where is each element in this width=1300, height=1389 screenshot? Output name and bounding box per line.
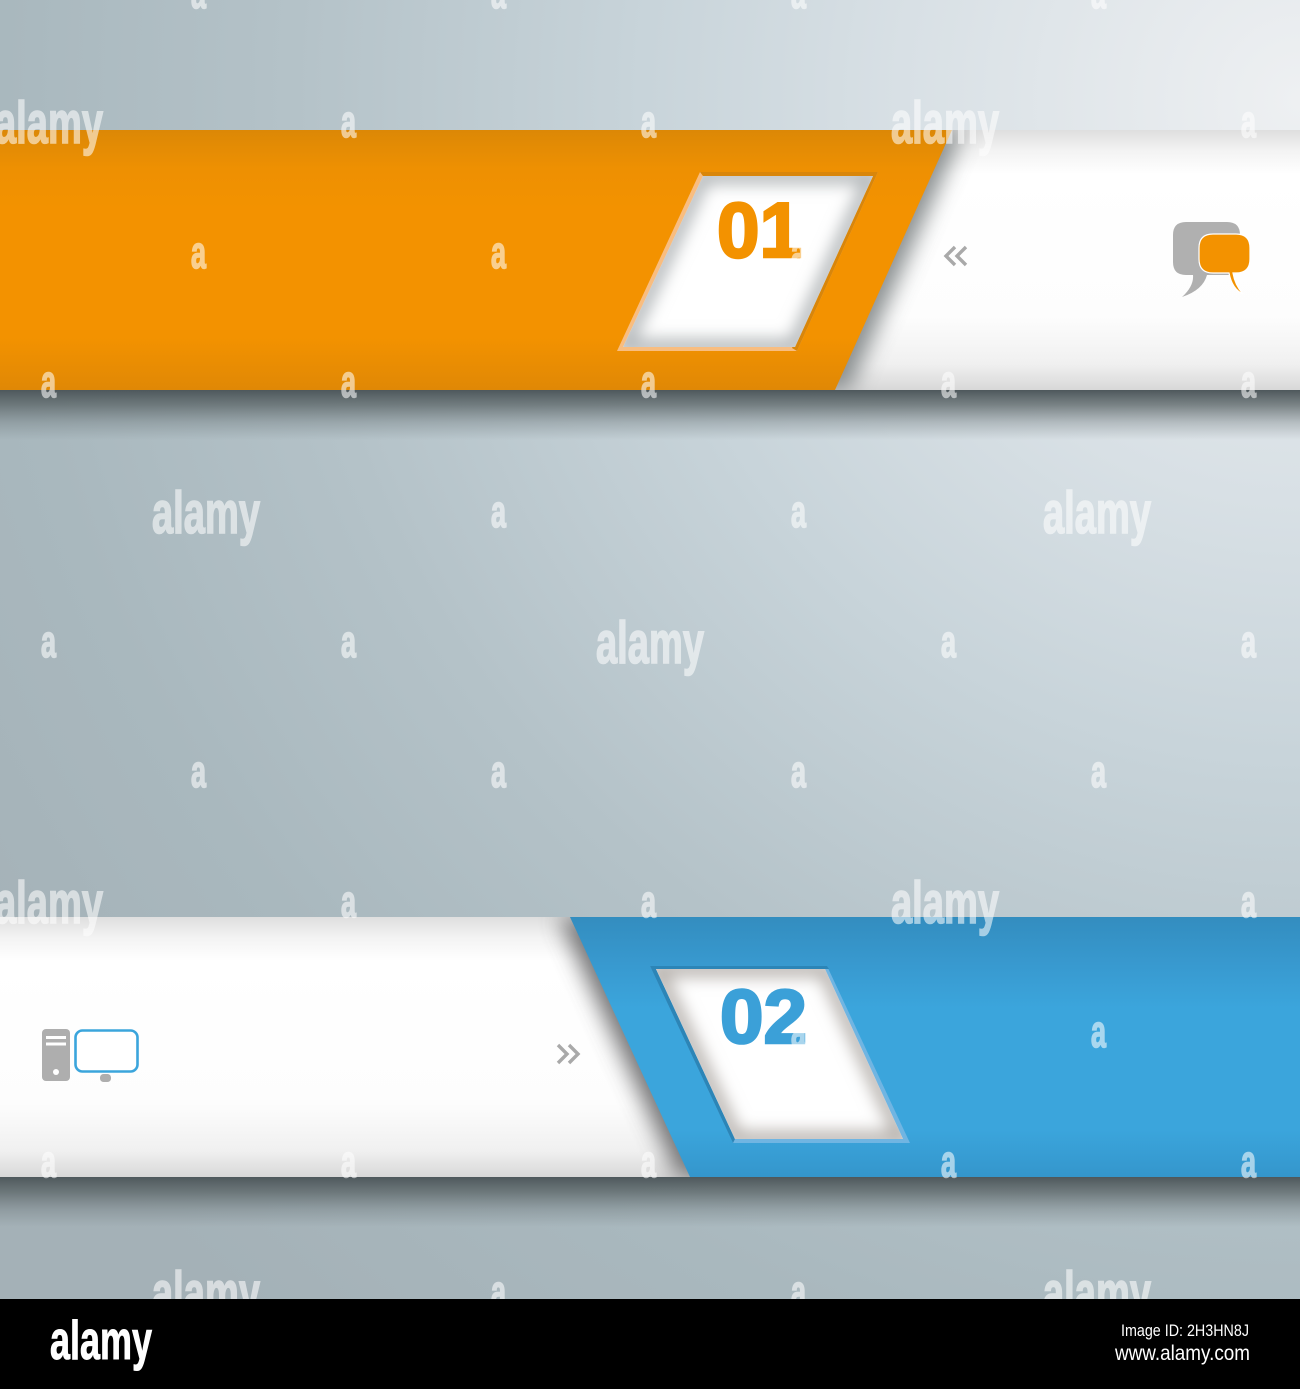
watermarks: alamy [0, 90, 103, 156]
watermarks: alamy [0, 870, 103, 936]
white band section [0, 917, 1300, 1177]
watermarks: aaaaa [41, 1136, 1256, 1187]
icon: speech bubbles [1173, 222, 1250, 297]
footer logo: alamy [50, 1309, 152, 1371]
watermarks: aaaaa [41, 356, 1256, 407]
chevrons right [558, 1045, 578, 1063]
orange band [0, 130, 952, 390]
number cutout 02 [650, 966, 910, 1143]
watermarks: aaaa [191, 1006, 1106, 1057]
watermarks: aaa [341, 96, 1256, 147]
watermarks: alamy [1043, 480, 1151, 546]
blue band [570, 917, 1300, 1177]
icon: desktop computer [42, 1029, 138, 1082]
watermarks: aaaa [191, 227, 1106, 278]
watermarks: aaa [341, 876, 1256, 927]
watermarks: alamy [152, 1260, 260, 1326]
number cutout 01 [617, 172, 878, 351]
website: www.alamy.com [1114, 1342, 1250, 1365]
watermarks: aa [491, 486, 806, 537]
watermarks: aa [491, 1266, 806, 1317]
image id: Image ID: 2H3HN8J [1121, 1321, 1249, 1340]
watermarks: alamy [1043, 1260, 1151, 1326]
panel: bottom band [0, 917, 1300, 1177]
watermarks: alamy [152, 480, 260, 546]
shadow under bottom band [0, 1177, 1300, 1227]
number 02: 02 [720, 975, 807, 1060]
orange band edge shadow [835, 130, 972, 390]
watermarks: aaaa [41, 616, 1256, 667]
blue band edge shadow [549, 917, 690, 1177]
watermarks: alamy [596, 610, 704, 676]
footer bar [0, 1299, 1300, 1389]
shadow under top band [0, 390, 1300, 440]
watermarks: alamy [891, 90, 999, 156]
number 01: 01 [717, 186, 802, 274]
watermarks: alamy [891, 870, 999, 936]
chevrons left [946, 247, 966, 265]
panel: top band [0, 130, 1300, 390]
white band section [0, 130, 1300, 390]
watermarks: aaaa [191, 746, 1106, 797]
